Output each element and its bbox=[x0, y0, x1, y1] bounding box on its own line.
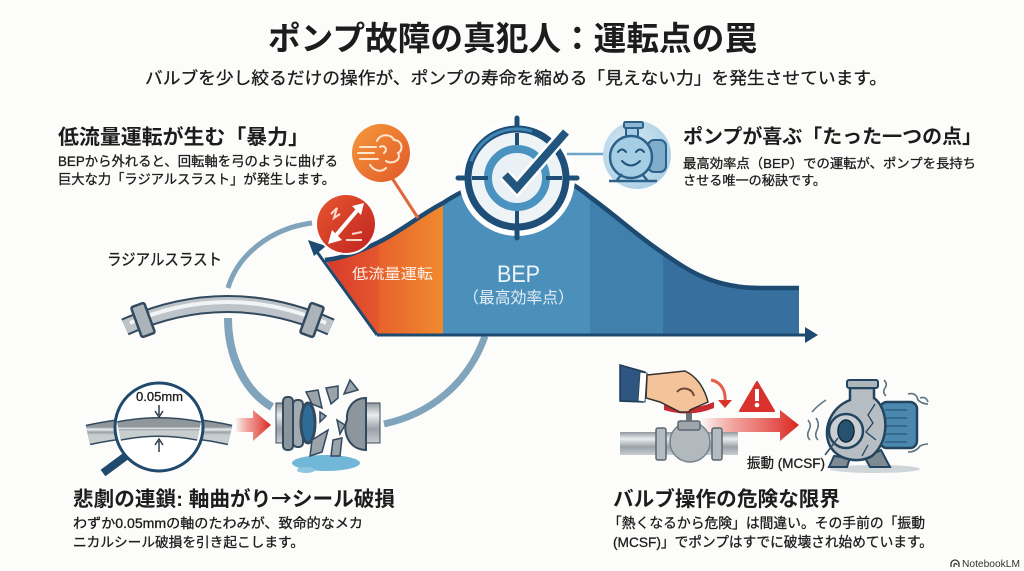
cracks bbox=[862, 404, 876, 456]
text block: low flow violence bbox=[58, 125, 338, 187]
heading: low flow: 低流量運転が生む「暴力」 bbox=[58, 125, 309, 149]
curve area: right zone 1 bbox=[590, 197, 663, 335]
label: BEP: BEP bbox=[497, 261, 540, 288]
body: valve limit bbox=[608, 515, 933, 550]
body: best point: させる唯一の秘訣です。 bbox=[683, 173, 826, 188]
heading: valve limit: バルブ操作の危険な限界 bbox=[613, 487, 840, 511]
arrow: valve to vibration bbox=[700, 410, 799, 441]
label: vibration: 振動 (MCSF) bbox=[747, 455, 825, 471]
body: valve limit: 「熱くなるから危険」は間違い。その手前の「振動 bbox=[608, 515, 925, 531]
heading: tragic chain: 悲劇の連鎖: 軸曲がり→シール破損 bbox=[73, 482, 396, 512]
illustration: broken mechanical seal bbox=[276, 380, 380, 473]
left axis with arrow bbox=[308, 240, 377, 335]
label: radial thrust: ラジアルスラスト bbox=[107, 252, 222, 269]
icon: target with check mark bbox=[454, 115, 580, 241]
curve area: right zone 2 bbox=[663, 253, 799, 335]
chart: pump efficiency curve bbox=[308, 174, 818, 343]
curved down arrow bbox=[711, 380, 732, 408]
pipe and valve bbox=[620, 410, 738, 462]
label: best efficiency point: （最高効率点） bbox=[463, 289, 574, 307]
label: 0.05mm: 0.05mm bbox=[136, 390, 183, 404]
vibration lines bbox=[808, 380, 928, 452]
red handle bbox=[664, 402, 714, 414]
illustration: bent shaft bbox=[125, 302, 331, 337]
motor bbox=[880, 402, 917, 448]
icon: turbulent flow bbox=[352, 124, 410, 182]
volute casing bbox=[827, 388, 885, 460]
illustration: magnified shaft deflection bbox=[88, 383, 230, 473]
label: low flow: 低流量運転 bbox=[352, 266, 433, 283]
subtitle: バルブを少し絞るだけの操作が、ポンプの寿命を縮める「見えない力」を発生させています。 bbox=[145, 68, 887, 88]
curve area: BEP zone bbox=[443, 174, 590, 335]
body: best point bbox=[683, 156, 976, 188]
arrow: shaft to seal bbox=[235, 410, 271, 441]
x axis with arrow bbox=[377, 327, 818, 343]
shaft outside lens bbox=[88, 427, 230, 435]
body: valve limit: (MCSF)」でポンプはすでに破壊され始めています。 bbox=[613, 534, 933, 550]
text block: tragic chain bbox=[73, 482, 396, 550]
connector: smiley pump bbox=[567, 153, 604, 155]
connector: orange icon bbox=[392, 178, 418, 218]
body: best point: 最高効率点（BEP）での運転が、ポンプを長持ち bbox=[683, 156, 976, 171]
magnifier handle bbox=[103, 456, 126, 473]
icon: warning triangle bbox=[740, 382, 774, 411]
curve area: low flow zone bbox=[325, 203, 443, 335]
hand and sleeve bbox=[620, 365, 708, 412]
body: tragic chain bbox=[73, 516, 363, 550]
logo: NotebookLM: NotebookLM bbox=[962, 558, 1020, 570]
body: low flow bbox=[58, 154, 338, 187]
body: tragic chain: ニカルシール破損を引き起こします。 bbox=[73, 535, 304, 550]
icon: smiling pump bbox=[603, 121, 671, 189]
feet bbox=[829, 450, 890, 467]
text block: best point bbox=[683, 125, 982, 188]
illustration: hand closing valve bbox=[620, 365, 799, 462]
curve outline bbox=[325, 174, 799, 288]
body: low flow: 巨大な力「ラジアルスラスト」が発生します。 bbox=[58, 172, 335, 187]
title: ポンプ故障の真犯人：運転点の罠 bbox=[268, 20, 757, 57]
body: low flow: BEPから外れると、回転軸を弓のように曲げる bbox=[58, 154, 338, 169]
deflection arrows bbox=[155, 405, 163, 452]
magnifier lens bbox=[115, 383, 203, 471]
heading: best point: ポンプが喜ぶ「たった一つの点」 bbox=[683, 125, 982, 148]
illustration: vibrating cracked pump bbox=[808, 380, 928, 473]
label: vibration bbox=[747, 438, 838, 471]
icon: radial thrust burst bbox=[315, 193, 377, 255]
text block: valve limit bbox=[608, 487, 933, 550]
cycle arrows bbox=[228, 223, 485, 424]
body: tragic chain: わずか0.05mmの軸のたわみが、致命的なメカ bbox=[73, 516, 363, 531]
